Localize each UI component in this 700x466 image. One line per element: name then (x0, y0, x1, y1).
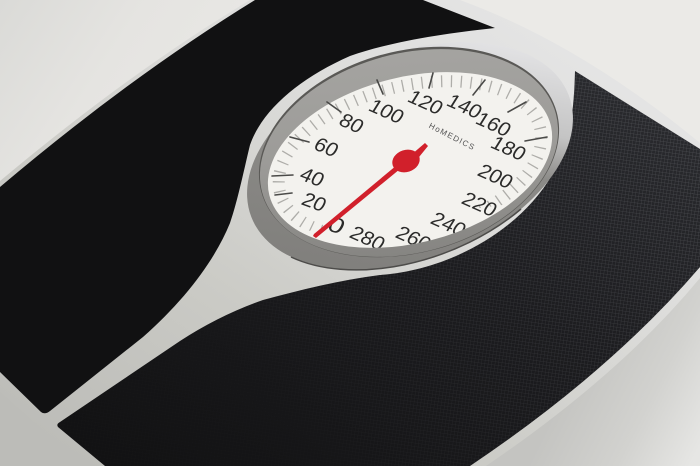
black mat: right pad (57, 71, 700, 466)
needle (313, 143, 428, 238)
dial numbers: 220 (457, 188, 501, 221)
dial numbers: 100 (364, 95, 408, 128)
dial numbers: 80 (335, 109, 368, 138)
dial numbers: 140 (442, 90, 486, 123)
dial numbers: 120 (403, 86, 447, 119)
dial numbers: 160 (471, 108, 515, 141)
black mat: left pad (0, 0, 495, 413)
bottom-left bevel of scale (0, 392, 85, 466)
brand name: HoMEDICS (427, 121, 477, 152)
dial numbers: 60 (310, 133, 343, 162)
dial numbers: 280 (345, 222, 389, 255)
dial numbers: 200 (473, 160, 517, 193)
major tick marks (272, 73, 547, 195)
bezel dark inner edge (235, 15, 583, 289)
dial numbers: 240 (426, 208, 470, 241)
mat mesh texture (270, 72, 700, 466)
dial numbers: 260 (391, 222, 435, 255)
dial numbers: 40 (296, 163, 328, 191)
bezel lower shadow edge (291, 209, 521, 270)
dial numbers (300, 91, 526, 248)
dial face (249, 44, 571, 276)
dial numbers: 20 (298, 188, 330, 216)
bezel outer ring (214, 0, 606, 313)
dial numbers: 180 (486, 132, 530, 165)
dial numbers: 0 (323, 212, 349, 239)
minor tick marks (272, 75, 548, 231)
dial assembly (247, 46, 573, 271)
recessed dial well (236, 18, 582, 288)
bottom-right bevel of scale (486, 278, 700, 466)
